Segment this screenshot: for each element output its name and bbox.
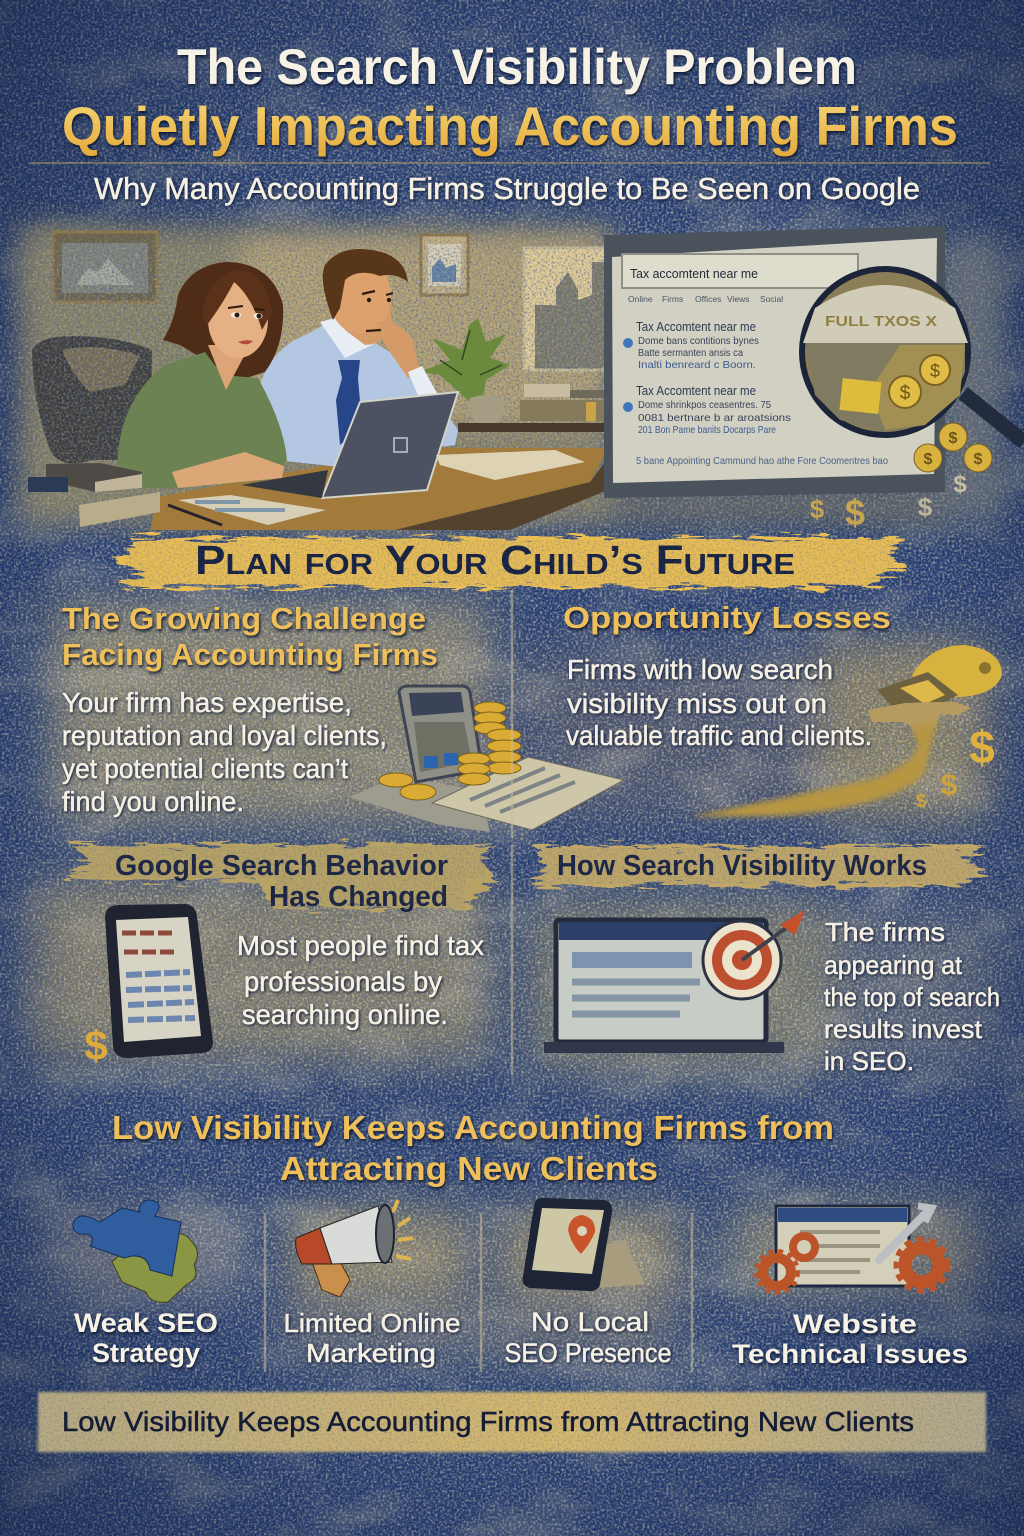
body text: the top of search <box>824 982 1000 1012</box>
body text <box>566 654 872 751</box>
banner text: Plan for Your Child’s Future <box>195 537 795 583</box>
result one <box>623 319 759 371</box>
icon: money slipping away: $ <box>969 721 995 773</box>
laptop <box>241 392 458 498</box>
body text: results invest <box>824 1014 983 1044</box>
magnifying glass: $ <box>930 361 940 381</box>
tabs: Offices <box>695 294 721 304</box>
label: SEO Presence <box>504 1338 672 1368</box>
body text <box>824 917 1000 1076</box>
label: Strategy <box>92 1338 200 1368</box>
title line 2: Quietly Impacting Accounting Firms <box>62 95 958 157</box>
coins and dollar signs: $ <box>918 492 933 522</box>
label: Technical Issues <box>732 1339 968 1369</box>
search results screen <box>604 226 945 498</box>
body text: Firms with low search <box>567 654 833 685</box>
result one: Inalti benreard c Boorn. <box>638 359 756 371</box>
heading <box>62 601 438 672</box>
title line 1: The Search Visibility Problem <box>177 39 857 95</box>
section heading: low visibility: Low Visibility Keeps Accounting Firms from <box>112 1109 834 1146</box>
body text: appearing at <box>824 950 963 980</box>
label: Marketing <box>306 1338 436 1368</box>
search box: Tax accomtent near me <box>630 266 758 281</box>
window <box>524 248 611 370</box>
result one: Tax Accomtent near me <box>636 319 756 334</box>
heading: Opportunity Losses <box>563 600 891 635</box>
icon: smartphone: $ <box>84 1022 108 1069</box>
subtitle: Why Many Accounting Firms Struggle to Be Seen on Google <box>94 171 920 206</box>
body text: visibility miss out on <box>567 688 827 719</box>
footer banner <box>36 540 988 1454</box>
body text: The firms <box>825 917 945 947</box>
result two: Tax Accomtent near me <box>636 383 756 398</box>
body text: searching online. <box>242 999 448 1030</box>
label <box>74 1308 218 1368</box>
body text: reputation and loyal clients, <box>62 720 387 751</box>
heading: Has Changed <box>269 881 448 913</box>
result two <box>623 383 791 436</box>
tabs: Online <box>628 294 653 304</box>
magnifying glass: FULL TXOS X <box>825 313 937 330</box>
label <box>504 1307 672 1368</box>
icon: calculator, coins and documents <box>349 686 624 832</box>
result two: Dome shrinkpos ceasentres. 75 <box>638 399 771 411</box>
result two: 0081 bertnare b ar aroatsions <box>638 412 791 424</box>
icon: browser with target <box>544 910 805 1053</box>
icon: money slipping away: $ <box>916 791 927 812</box>
wall texture <box>16 226 1009 532</box>
result one: Batte sermanten ansis ca <box>638 347 743 359</box>
heading strip <box>530 846 988 886</box>
search box <box>622 254 858 288</box>
woman <box>117 262 287 488</box>
plant <box>420 318 510 423</box>
banner <box>112 537 908 587</box>
desk <box>150 448 608 530</box>
man <box>253 249 458 467</box>
wall picture <box>53 232 157 302</box>
heading: How Search Visibility Works <box>557 850 927 882</box>
coins and dollar signs: $ <box>924 451 933 468</box>
tabs: Firms <box>662 294 683 304</box>
icon: phone with map pin <box>523 1198 645 1291</box>
panel: growing challenge <box>62 601 624 832</box>
heading: Google Search Behavior <box>115 850 448 882</box>
coins and dollar signs: $ <box>949 430 958 447</box>
footer text: Low Visibility Keeps Accounting Firms from Attracting New Clients <box>62 1406 914 1437</box>
office wall <box>22 228 1002 523</box>
heading <box>115 850 448 913</box>
magnifying glass <box>802 269 1024 442</box>
label: Website <box>793 1309 917 1339</box>
coins and dollar signs: $ <box>953 471 967 498</box>
coins and dollar signs <box>810 423 992 533</box>
body text: find you online. <box>62 786 244 817</box>
body text: in SEO. <box>824 1046 914 1076</box>
strip texture <box>38 540 986 1452</box>
body text <box>237 930 484 1030</box>
panel: how search visibility works <box>530 846 1000 1076</box>
title <box>62 39 958 157</box>
icon: puzzle pieces <box>73 1200 198 1302</box>
item: website technical issues <box>732 1206 968 1369</box>
label: Weak SEO <box>74 1308 218 1338</box>
heading: The Growing Challenge <box>62 601 426 636</box>
label <box>284 1308 460 1368</box>
icon: smartphone <box>84 904 213 1069</box>
result one: Dome bans contitions bynes <box>638 335 759 347</box>
body text: Your firm has expertise, <box>62 687 352 718</box>
coins and dollar signs: $ <box>974 451 983 468</box>
body text: valuable traffic and clients. <box>566 720 872 751</box>
icon: megaphone <box>296 1200 413 1297</box>
icon: money slipping away <box>689 645 1002 817</box>
heading: Facing Accounting Firms <box>62 637 438 672</box>
heading strip <box>62 844 496 908</box>
tabs: Social <box>760 294 783 304</box>
footer result: 5 bane Appointing Cammund hao athe Fore Coomentres bao <box>636 455 888 467</box>
result two: 201 Bon Pame banits Docarps Pare <box>638 424 776 436</box>
body text: yet potential clients can’t <box>62 753 348 784</box>
label <box>732 1309 968 1369</box>
panel: google search behavior <box>62 844 496 1069</box>
body text: Most people find tax <box>237 930 484 961</box>
dividers <box>30 163 990 1372</box>
item: limited online marketing <box>284 1200 460 1368</box>
label: Limited Online <box>284 1308 460 1338</box>
tabs: Views <box>727 294 750 304</box>
hero illustration <box>0 210 1024 540</box>
section heading: low visibility <box>112 1109 834 1187</box>
item: weak SEO strategy <box>73 1200 218 1368</box>
body text: professionals by <box>244 966 442 997</box>
magnifying glass: $ <box>900 383 911 404</box>
label: No Local <box>531 1307 649 1337</box>
item: no local SEO presence <box>504 1198 672 1368</box>
coins and dollar signs: $ <box>810 494 825 524</box>
icon: money slipping away: $ <box>941 769 958 802</box>
framed picture <box>421 235 468 295</box>
icon: browser and gears <box>756 1206 948 1293</box>
desk papers <box>168 450 585 525</box>
section heading: low visibility: Attracting New Clients <box>280 1150 658 1187</box>
shelf <box>458 384 608 432</box>
books <box>28 463 160 527</box>
office chair <box>32 336 152 463</box>
tabs <box>628 294 783 304</box>
body text <box>62 687 387 817</box>
panel: opportunity losses <box>563 600 1002 817</box>
coins and dollar signs: $ <box>845 492 865 533</box>
